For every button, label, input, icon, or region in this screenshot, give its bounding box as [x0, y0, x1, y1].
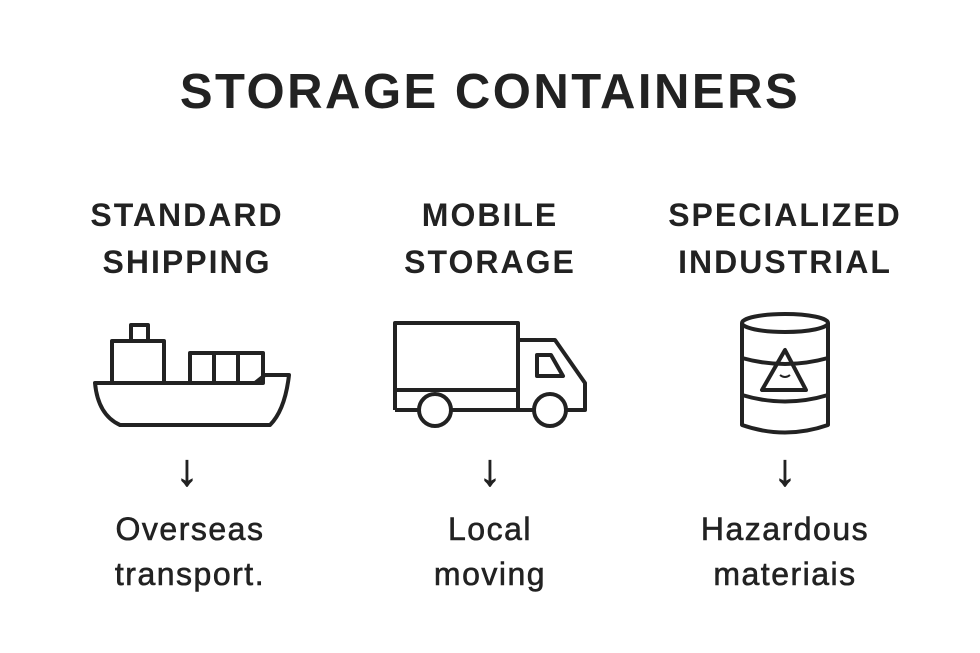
- heading: standard shipping: SHIPPING: [103, 244, 271, 280]
- heading: mobile storage: [404, 197, 576, 280]
- heading: mobile storage: STORAGE: [404, 244, 576, 280]
- arrow 1: ↓: [176, 446, 198, 495]
- label: local moving: Local: [448, 511, 532, 547]
- heading: standard shipping: STANDARD: [90, 197, 284, 233]
- icon: hazard barrel: [742, 314, 828, 432]
- label: overseas transport: transport.: [115, 556, 265, 592]
- label: local moving: moving: [434, 556, 546, 592]
- label: hazardous materials: [701, 511, 869, 592]
- label: hazardous materials: Hazardous: [701, 511, 869, 547]
- arrow 3: ↓: [774, 446, 796, 495]
- icon: truck: [395, 323, 585, 426]
- heading: specialized industrial: [668, 197, 902, 280]
- heading: specialized industrial: INDUSTRIAL: [678, 244, 892, 280]
- label: overseas transport: Overseas: [116, 511, 264, 547]
- title: STORAGE CONTAINERS: [180, 65, 800, 119]
- heading: mobile storage: MOBILE: [422, 197, 558, 233]
- label: hazardous materials: materiais: [713, 556, 857, 592]
- label: local moving: [434, 511, 546, 592]
- label: overseas transport: [115, 511, 265, 592]
- icon: ship: [95, 325, 289, 425]
- heading: standard shipping: [90, 197, 284, 280]
- arrow 2: ↓: [479, 446, 501, 495]
- heading: specialized industrial: SPECIALIZED: [668, 197, 902, 233]
